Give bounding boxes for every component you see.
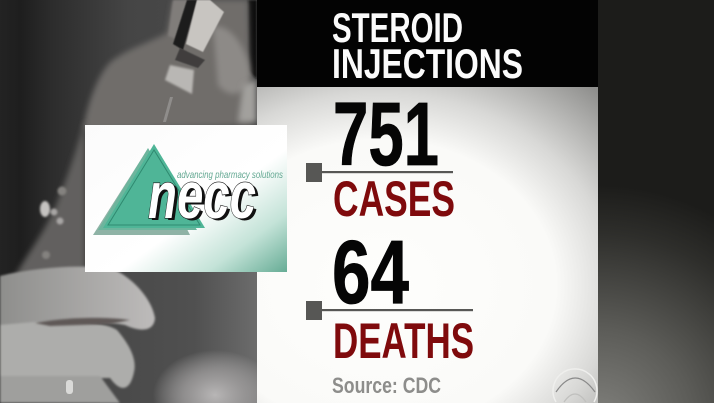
label cases: CASES — [333, 171, 455, 227]
logo tagline: advancing pharmacy solutions — [177, 169, 284, 181]
stat: 64 deaths — [306, 223, 474, 369]
card background — [85, 125, 287, 272]
background: right dark band — [598, 0, 714, 403]
heading: steroid injections: STEROID — [332, 4, 463, 51]
number 64: 64 — [332, 223, 409, 323]
marker and rule — [306, 163, 453, 182]
marker and rule — [306, 301, 473, 320]
title bar — [257, 0, 598, 87]
stat: 751 cases — [306, 85, 455, 227]
network logo watermark — [553, 369, 597, 402]
label deaths: DEATHS — [333, 313, 474, 369]
vial — [163, 0, 224, 122]
heading: steroid injections: INJECTIONS — [332, 40, 523, 87]
rings — [40, 186, 66, 259]
heading: steroid injections — [332, 4, 523, 87]
logo wordmark: necc — [151, 160, 259, 234]
lower fingers — [0, 267, 155, 403]
panel: statistics — [257, 0, 598, 403]
logo card: necc — [85, 125, 287, 272]
photo: hands holding syringe and vial — [0, 0, 257, 403]
panel background — [257, 0, 598, 403]
logo triangles — [93, 144, 205, 235]
source note: Source: CDC — [332, 373, 441, 398]
number 751: 751 — [333, 85, 439, 185]
logo wordmark: necc — [148, 158, 256, 232]
